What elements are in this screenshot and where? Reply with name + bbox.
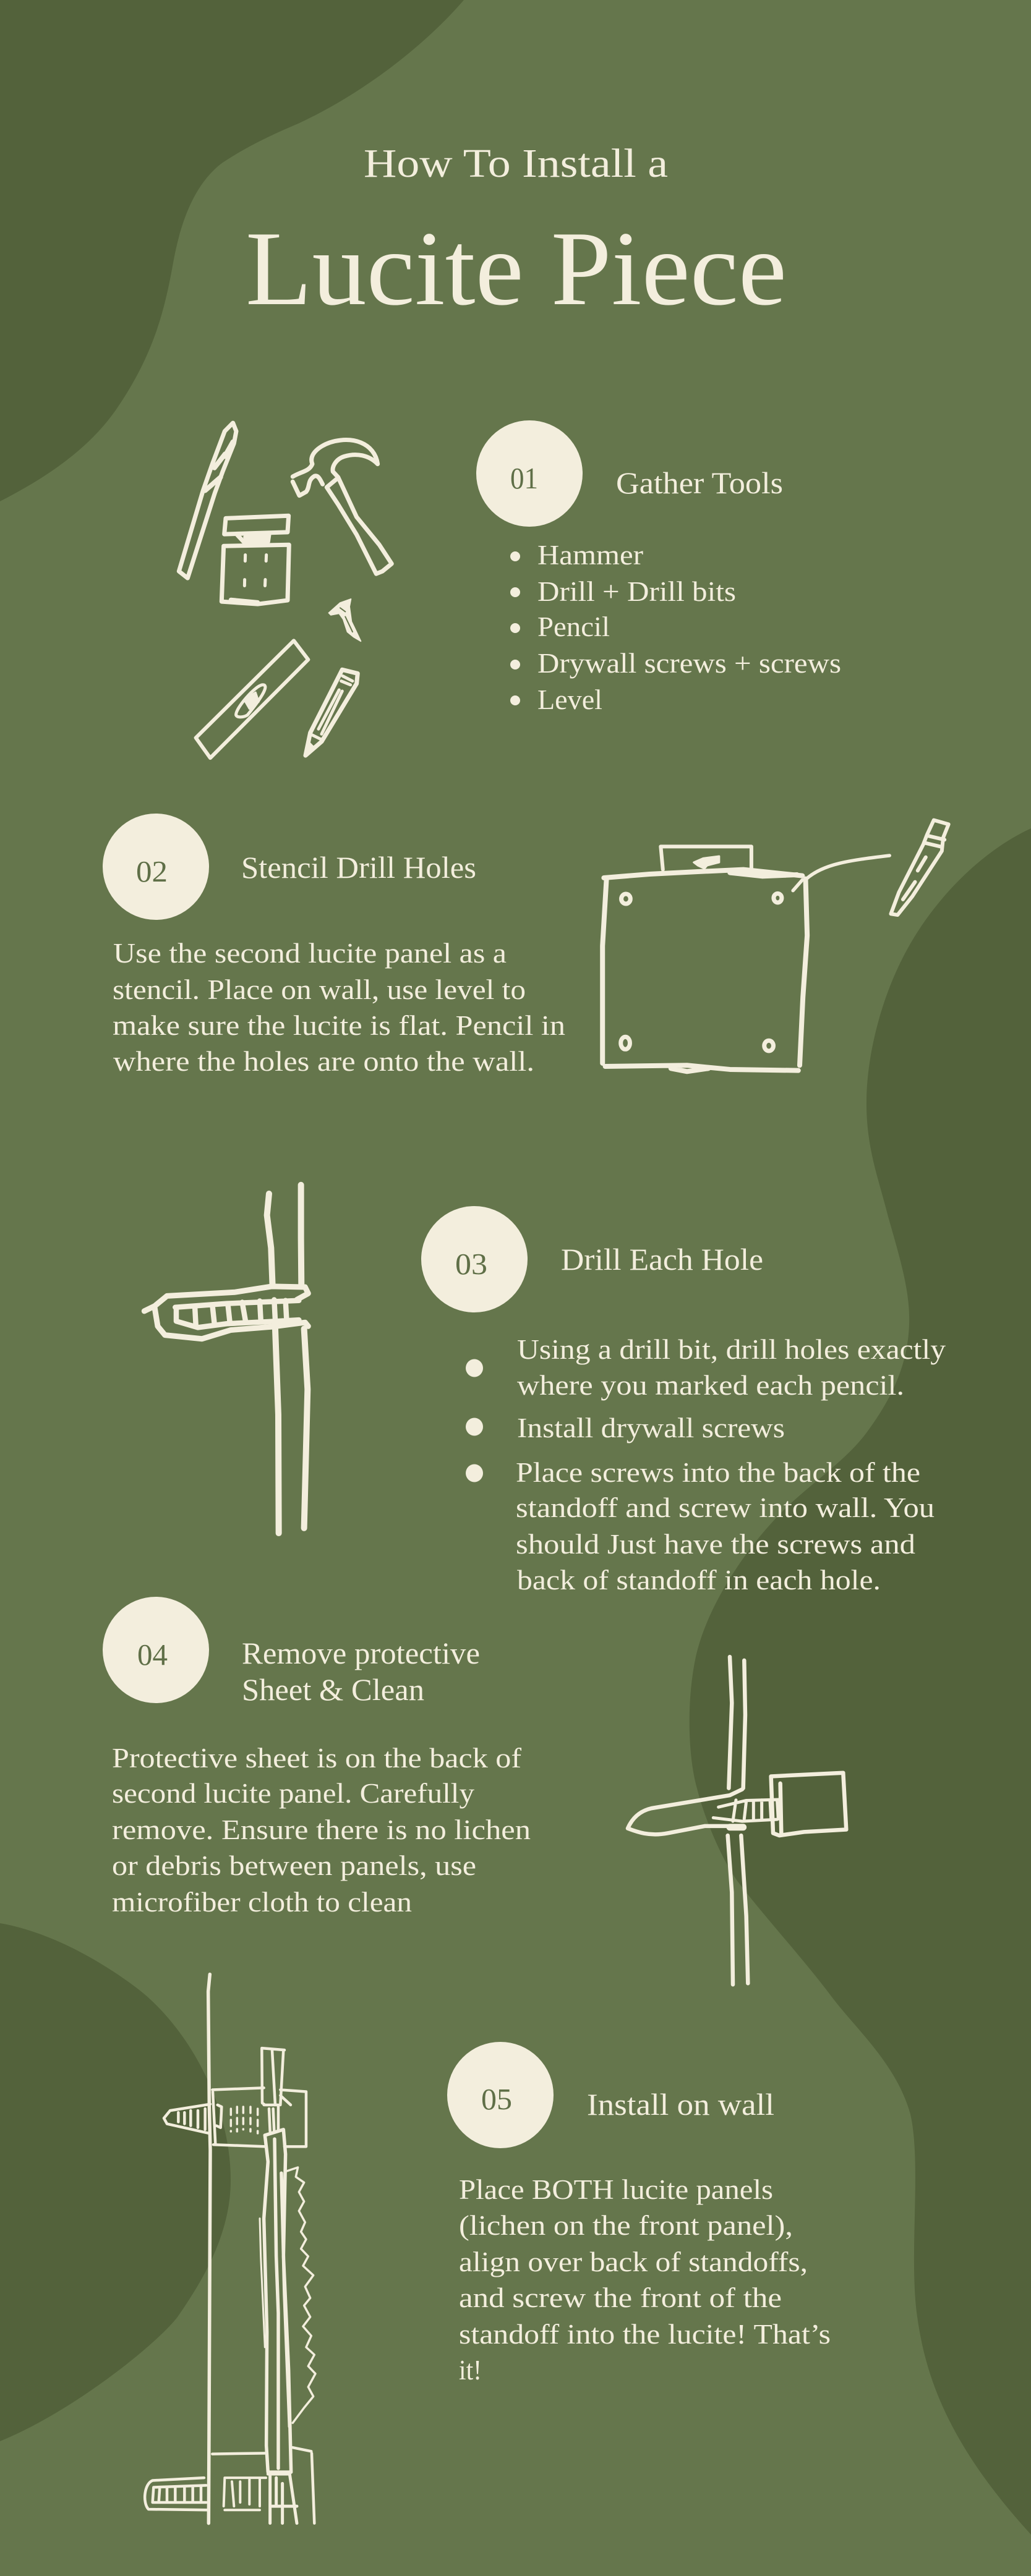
heading: install on wall: Install on wall xyxy=(587,2087,774,2122)
instruction list: Place screws into the back of the xyxy=(516,1457,920,1488)
bottom screw xyxy=(145,2478,208,2510)
heading: remove protective sheet and clean xyxy=(242,1636,480,1707)
number badge 01: 01 xyxy=(510,461,538,495)
instruction list: standoff and screw into wall. You xyxy=(516,1492,935,1523)
number badge 03 xyxy=(421,1206,528,1312)
background blob: top left xyxy=(0,0,464,501)
bottom standoff xyxy=(224,2478,266,2510)
heading: drill each hole: Drill Each Hole xyxy=(561,1242,763,1277)
number badge 05 xyxy=(447,2042,554,2148)
front panel block xyxy=(262,2048,306,2146)
screw thread xyxy=(175,1299,299,1327)
top screw xyxy=(164,2104,210,2133)
body text xyxy=(113,938,565,1077)
panel: step 4 remove protective sheet xyxy=(103,1597,846,1984)
panel: step 1 gather tools xyxy=(179,420,841,758)
number badge 02 xyxy=(103,814,209,920)
tool list: Level xyxy=(537,684,602,715)
lucite panels xyxy=(264,2130,291,2472)
number badge 04: 04 xyxy=(137,1638,168,1672)
tool list: Hammer xyxy=(537,540,643,571)
icon: pencil xyxy=(306,670,357,755)
number badge 02: 02 xyxy=(136,854,168,888)
wall lines xyxy=(267,1185,307,1533)
instruction list: where you marked each pencil. xyxy=(517,1370,904,1401)
icon: standoff xyxy=(221,516,289,604)
body text: stencil. Place on wall, use level to xyxy=(113,974,526,1005)
body text: where the holes are onto the wall. xyxy=(113,1046,534,1077)
title line two: Lucite Piece xyxy=(246,210,787,328)
body text: Use the second lucite panel as a xyxy=(113,938,507,969)
panel: step 3 drill each hole xyxy=(144,1185,946,1596)
icon: hammer xyxy=(293,440,391,574)
icon: drill bit xyxy=(179,423,236,578)
heading: remove protective sheet and clean: Sheet & Clean xyxy=(242,1672,424,1707)
bottom lines xyxy=(212,2447,314,2523)
body text: (lichen on the front panel), xyxy=(459,2210,793,2241)
number badge 04 xyxy=(103,1597,209,1703)
panel: step 2 stencil drill holes xyxy=(103,814,949,1077)
illustration: standoff back on wall xyxy=(628,1657,846,1984)
icon: level xyxy=(196,640,308,758)
body text: remove. Ensure there is no lichen xyxy=(112,1814,531,1845)
level on top xyxy=(661,846,751,870)
number badge 01 xyxy=(476,420,583,527)
number badge 03: 03 xyxy=(455,1247,487,1281)
instruction list: should Just have the screws and xyxy=(516,1529,915,1560)
pencil line xyxy=(793,856,889,891)
tool list: Pencil xyxy=(537,611,610,642)
heading: remove protective sheet and clean: Remove protective xyxy=(242,1636,480,1670)
panel outline xyxy=(602,870,807,1071)
body text: or debris between panels, use xyxy=(112,1850,476,1881)
body text: microfiber cloth to clean xyxy=(112,1887,412,1918)
illustration: tools xyxy=(179,423,391,758)
body text xyxy=(112,1743,531,1918)
body text: align over back of standoffs, xyxy=(459,2247,808,2277)
hole markers xyxy=(621,893,782,1051)
body text: second lucite panel. Carefully xyxy=(112,1778,475,1809)
standoff back xyxy=(771,1773,846,1835)
body text: Place BOTH lucite panels xyxy=(459,2174,773,2205)
illustration: screw drilled into wall xyxy=(144,1185,308,1533)
background blob: right side xyxy=(690,828,1031,2535)
illustration: assembled lucite panels on wall xyxy=(145,1975,315,2523)
background blob: bottom left xyxy=(0,1923,231,2441)
title xyxy=(246,141,787,328)
body text: it! xyxy=(459,2355,482,2386)
wall lines xyxy=(728,1657,748,1984)
instruction list: Using a drill bit, drill holes exactly xyxy=(517,1334,946,1365)
title line one: How To Install a xyxy=(364,141,668,186)
screw outline xyxy=(144,1286,308,1339)
tool list: Drill + Drill bits xyxy=(537,576,736,607)
body text: standoff into the lucite! That’s xyxy=(459,2319,831,2350)
body text: and screw the front of the xyxy=(459,2282,782,2313)
body text: make sure the lucite is flat. Pencil in xyxy=(113,1010,565,1041)
top standoff xyxy=(212,2088,266,2146)
panel: step 5 install on wall xyxy=(145,1975,831,2523)
body text: Protective sheet is on the back of xyxy=(112,1743,521,1774)
screw xyxy=(628,1789,743,1834)
icon: drywall screw xyxy=(329,599,361,641)
heading: gather tools: Gather Tools xyxy=(616,465,783,500)
instruction list xyxy=(466,1334,946,1596)
pencil xyxy=(891,820,949,915)
wall line xyxy=(208,1975,210,2523)
heading: stencil drill holes: Stencil Drill Holes xyxy=(241,850,476,885)
instruction list: back of standoff in each hole. xyxy=(517,1565,881,1596)
tool list: Drywall screws + screws xyxy=(537,648,841,679)
lichen squiggle xyxy=(286,2167,315,2423)
instruction list: Install drywall screws xyxy=(517,1413,785,1443)
illustration: lucite panel with level and pencil xyxy=(602,820,949,1071)
number badge 05: 05 xyxy=(481,2082,512,2116)
tool list xyxy=(510,540,841,715)
body text xyxy=(459,2174,831,2386)
